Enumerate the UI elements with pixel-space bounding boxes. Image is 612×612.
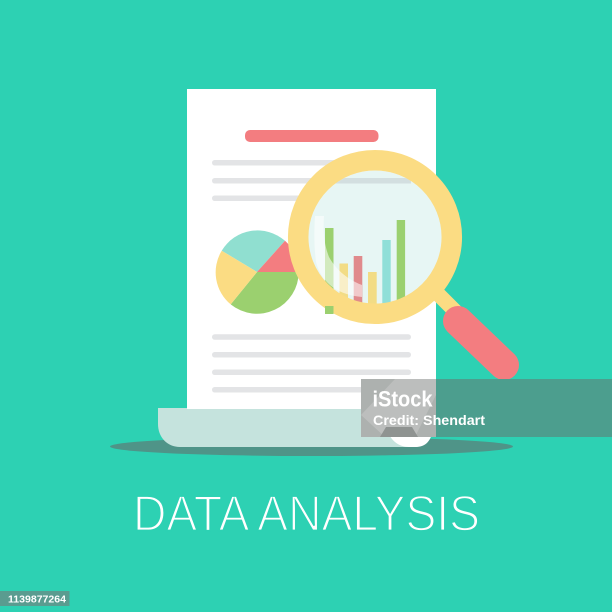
scroll base xyxy=(158,408,433,447)
watermark texture xyxy=(361,379,436,437)
watermark credit: Credit: Shendart xyxy=(373,412,485,428)
scroll curl xyxy=(387,430,432,447)
handle neck xyxy=(437,293,462,318)
lower text lines xyxy=(212,334,411,392)
pie chart xyxy=(216,230,299,314)
id tag background xyxy=(0,591,70,606)
handle grip xyxy=(458,321,504,365)
watermark shaded patch xyxy=(380,427,418,437)
title: DATA ANALYSIS xyxy=(133,486,480,542)
green bar foot below ring xyxy=(325,306,334,314)
watermark brand: iStock xyxy=(372,387,433,412)
watermark left panel xyxy=(361,379,436,437)
image id tag xyxy=(0,591,70,606)
watermark right panel xyxy=(436,379,612,437)
heading bar xyxy=(245,130,378,142)
lens ring xyxy=(298,160,452,314)
line seen through lens xyxy=(336,178,411,184)
watermark banner xyxy=(361,379,612,437)
paper sheet xyxy=(187,89,436,409)
lens highlight xyxy=(314,216,362,297)
document xyxy=(158,89,436,447)
ground shadow xyxy=(110,437,513,456)
upper text lines xyxy=(212,160,411,201)
bar chart xyxy=(325,220,406,304)
id tag number: 1139877264 xyxy=(8,594,66,606)
lens glass xyxy=(308,170,442,304)
magnifying glass xyxy=(298,160,504,365)
